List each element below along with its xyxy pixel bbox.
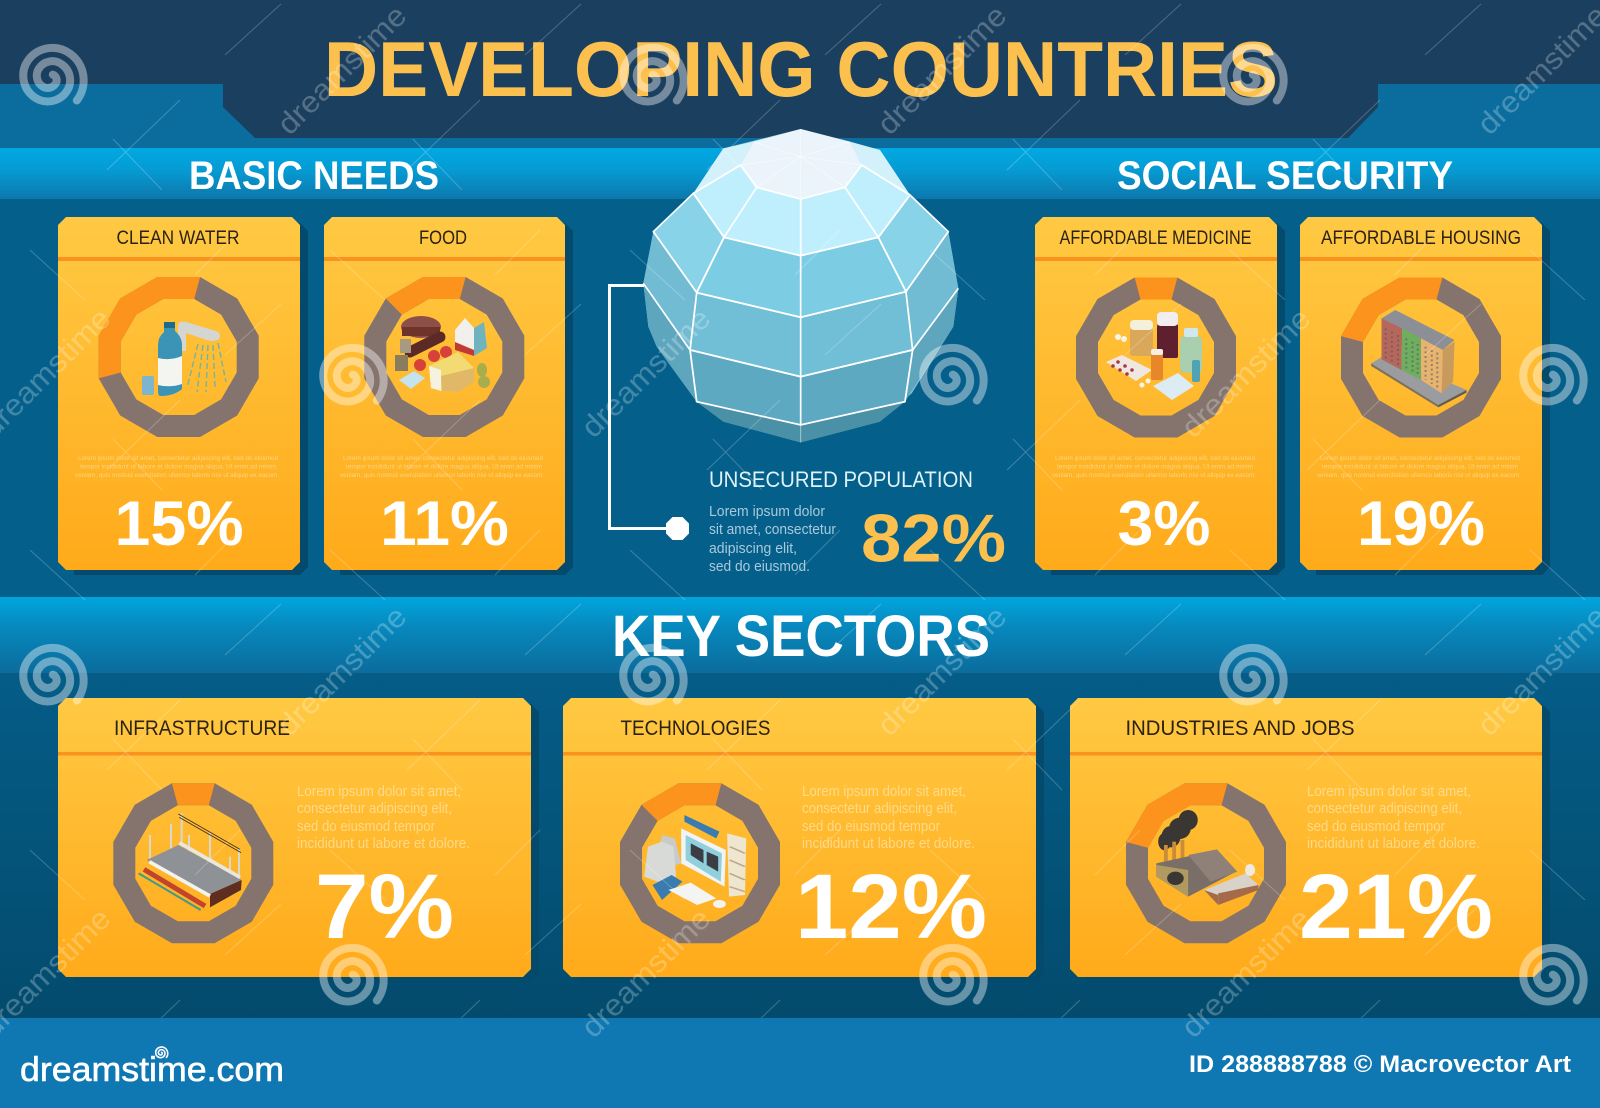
- percentage: 21%: 21%: [1299, 856, 1493, 958]
- body text: industries and jobs: consectetur adipiscing elit,: [1307, 801, 1462, 817]
- heading: social security: SOCIAL SECURITY: [1117, 154, 1453, 198]
- percentage: 19%: 19%: [1357, 489, 1485, 559]
- body text: technologies: [802, 784, 975, 852]
- heading: basic needs: BASIC NEEDS: [189, 154, 439, 198]
- body text: technologies: sed do eiusmod tempor: [802, 819, 940, 835]
- callout heading: UNSECURED POPULATION: [709, 467, 973, 492]
- heading: key sectors: KEY SECTORS: [612, 604, 990, 669]
- body text: affordable housing: [1317, 455, 1521, 479]
- callout: unsecured population: [709, 467, 1006, 576]
- body text: food: [340, 455, 544, 479]
- watermark: dreamstime text: dreamstime: [271, 0, 413, 141]
- percentage: 7%: 7%: [315, 856, 454, 958]
- body text: technologies: consectetur adipiscing elit,: [802, 801, 957, 817]
- watermark: dreamstime text: dreamstime: [575, 902, 717, 1044]
- donut: infrastructure: [113, 783, 273, 943]
- band: key sectors: [0, 597, 1600, 673]
- header side bands: [0, 84, 1600, 148]
- panel: clean water: [58, 217, 308, 575]
- body text: clean water: veniam, quis nostrud exercitation ullamco laboris nisi ut aliquip ex eacom.: [75, 472, 279, 479]
- watermark: dreamstime text: dreamstime: [1175, 302, 1317, 444]
- callout text: [709, 504, 836, 575]
- body text: affordable housing: veniam, quis nostrud exercitation ullamco laboris nisi ut aliquip ex eacom.: [1317, 472, 1521, 479]
- band: basic needs and social security: [0, 148, 1600, 199]
- watermark: dreamstime text: dreamstime: [1175, 902, 1317, 1044]
- body text: affordable medicine: Lorem ipsum dolor sit amet, consectetur adipiscing elit, sed do eiusmod: [1055, 455, 1255, 462]
- body text: affordable housing: Lorem ipsum dolor sit amet, consectetur adipiscing elit, sed do eiusmod: [1320, 455, 1520, 462]
- icon: apartment buildings: [1371, 310, 1467, 407]
- body text: food: tempor incididunt ut labore et dolore magna aliqua. Ut enim ad minim: [346, 464, 542, 470]
- panel: affordable housing: [1300, 217, 1550, 575]
- page background: [0, 138, 1600, 1018]
- icon: water bottle and shower: [142, 322, 226, 396]
- body text: food: veniam, quis nostrud exercitation ullamco laboris nisi ut aliquip ex eacom.: [340, 472, 544, 479]
- body text: technologies: incididunt ut labore et dolore.: [802, 836, 975, 852]
- donut: food: [364, 277, 524, 437]
- body text: clean water: [75, 455, 279, 479]
- body text: industries and jobs: sed do eiusmod tempor: [1307, 819, 1445, 835]
- callout text: adipiscing elit,: [709, 541, 797, 557]
- body text: affordable medicine: tempor incididunt ut labore et dolore magna aliqua. Ut enim ad minim: [1057, 464, 1253, 470]
- percentage: 82%: 82%: [861, 500, 1006, 576]
- panel: affordable medicine: [1035, 217, 1285, 575]
- connector line with dot: [610, 286, 689, 540]
- card title: affordable housing: AFFORDABLE HOUSING: [1321, 228, 1521, 249]
- body text: industries and jobs: incididunt ut labore et dolore.: [1307, 836, 1480, 852]
- body text: infrastructure: [297, 784, 470, 852]
- icon: computer, towers and solar panel: [644, 815, 746, 908]
- panel: technologies: [563, 698, 1044, 983]
- card title: food: FOOD: [419, 228, 467, 249]
- icon: factory with smoke: [1156, 810, 1258, 905]
- footer credit: ID 288888788 © Macrovector Art: [1189, 1051, 1571, 1078]
- body text: food: Lorem ipsum dolor sit amet, consectetur adipiscing elit, sed do eiusmod: [343, 455, 543, 462]
- percentage: 11%: 11%: [380, 489, 509, 559]
- panel: infrastructure: [58, 698, 539, 983]
- icon: road with utility lines: [139, 813, 242, 910]
- donut: clean water: [99, 277, 259, 437]
- donut: industries and jobs: [1126, 783, 1286, 943]
- body text: industries and jobs: Lorem ipsum dolor sit amet,: [1307, 784, 1471, 800]
- body text: infrastructure: sed do eiusmod tempor: [297, 819, 435, 835]
- percentage: 15%: 15%: [114, 489, 244, 559]
- watermark: dreamstime text: dreamstime: [575, 302, 717, 444]
- card title: affordable medicine: AFFORDABLE MEDICINE: [1060, 228, 1252, 249]
- body text: affordable medicine: [1052, 455, 1256, 479]
- header dark panel: [0, 0, 1600, 138]
- panel: food: [324, 217, 573, 575]
- body text: infrastructure: consectetur adipiscing elit,: [297, 801, 452, 817]
- card title: industries and jobs: INDUSTRIES AND JOBS: [1126, 717, 1354, 740]
- panel: industries and jobs: [1070, 698, 1550, 983]
- callout text: sit amet, consectetur: [709, 522, 836, 538]
- icon: food pile: [395, 316, 490, 392]
- percentage: 3%: 3%: [1118, 489, 1210, 559]
- body text: infrastructure: Lorem ipsum dolor sit amet,: [297, 784, 461, 800]
- callout text: sed do eiusmod.: [709, 559, 810, 575]
- percentage: 12%: 12%: [795, 856, 987, 958]
- footer logo spiral: [156, 1047, 168, 1058]
- donut: technologies: [620, 783, 780, 943]
- donut: affordable medicine: [1076, 278, 1236, 438]
- globe: segmented sphere: [643, 129, 958, 442]
- body text: clean water: Lorem ipsum dolor sit amet, consectetur adipiscing elit, sed do eiusmod: [78, 455, 278, 462]
- body text: affordable housing: tempor incididunt ut labore et dolore magna aliqua. Ut enim ad minim: [1322, 464, 1518, 470]
- body text: industries and jobs: [1307, 784, 1480, 852]
- watermark: dreamstime text: dreamstime: [871, 600, 1013, 742]
- body text: affordable medicine: veniam, quis nostrud exercitation ullamco laboris nisi ut aliquip ex eacom.: [1052, 472, 1256, 479]
- donut: affordable housing: [1341, 278, 1501, 438]
- title: DEVELOPING COUNTRIES: [324, 25, 1278, 113]
- body text: technologies: Lorem ipsum dolor sit amet,: [802, 784, 966, 800]
- body text: infrastructure: incididunt ut labore et dolore.: [297, 836, 470, 852]
- card title: clean water: CLEAN WATER: [116, 228, 240, 249]
- icon: medicine bottles and pills: [1106, 312, 1202, 400]
- card title: technologies: TECHNOLOGIES: [620, 717, 770, 740]
- card title: infrastructure: INFRASTRUCTURE: [114, 717, 290, 740]
- callout text: Lorem ipsum dolor: [709, 504, 825, 520]
- watermark: dreamstime text: dreamstime: [871, 0, 1013, 141]
- footer logo text: dreamstime.com: [20, 1051, 284, 1089]
- body text: clean water: tempor incididunt ut labore et dolore magna aliqua. Ut enim ad minim: [80, 464, 276, 470]
- footer bar: [0, 1018, 1600, 1108]
- watermark: dreamstime text: dreamstime: [271, 600, 413, 742]
